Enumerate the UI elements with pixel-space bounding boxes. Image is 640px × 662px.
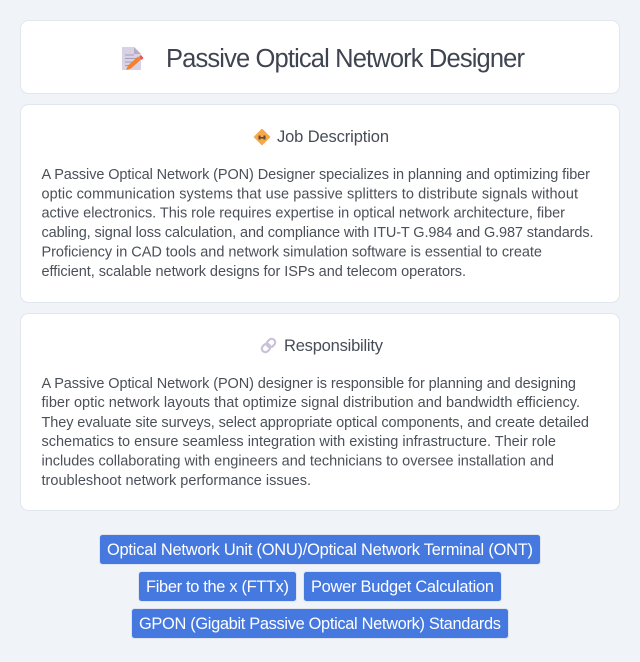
job description text: A Passive Optical Network (PON) Designer specializes in planning and optimizing fiber (42, 167, 590, 183)
icon: chain link (260, 337, 277, 354)
responsibility text: A Passive Optical Network (PON) designer is responsible for planning and designing (42, 376, 576, 392)
tag: FTTx (138, 572, 296, 602)
tag: ONU/ONT: Optical Network Unit (ONU)/Optical Network Terminal (ONT) (107, 541, 533, 559)
responsibility text: fiber optic network layouts that optimize signal distribution and bandwidth efficiency. (42, 395, 580, 411)
job description text (42, 167, 594, 280)
responsibility text: schematics to ensure seamless integration with existing infrastructure. Their role (42, 434, 556, 450)
responsibility text (42, 376, 589, 489)
job description text: efficient, scalable network designs for ISPs and telecom operators. (42, 264, 466, 280)
tag: power budget (304, 572, 502, 602)
tag: power budget: Power Budget Calculation (311, 578, 494, 596)
panel: responsibility (20, 314, 620, 510)
tag: ONU/ONT (100, 534, 540, 564)
responsibility text: includes collaborating with engineers and technicians to oversee installation and (42, 454, 554, 470)
job description text: Proficiency in CAD tools and network simulation software is essential to create (42, 245, 542, 261)
panel: header (20, 20, 620, 94)
job description text: active electronics. This role requires expertise in optical network architecture, fiber (42, 206, 565, 222)
title: Passive Optical Network Designer (166, 45, 526, 73)
heading: job description: Job Description (277, 128, 389, 146)
job description text: optic communication systems that use passive splitters to distribute signals without (42, 186, 578, 202)
tag: FTTx: Fiber to the x (FTTx) (146, 578, 289, 596)
heading: responsibility: Responsibility (284, 337, 384, 355)
responsibility text: They evaluate site surveys, select appropriate optical components, and create detailed (42, 415, 589, 431)
job description text: cabling, signal loss calculation, and compliance with ITU-T G.984 and G.987 standards. (42, 225, 594, 241)
icon: document with pencil (122, 47, 144, 70)
icon: diamond sign (254, 130, 270, 144)
responsibility text: troubleshoot network performance issues. (42, 473, 311, 489)
tag: GPON standards (132, 608, 508, 638)
panel: job description (20, 104, 620, 302)
tag: GPON standards: GPON (Gigabit Passive Optical Network) Standards (139, 615, 501, 633)
